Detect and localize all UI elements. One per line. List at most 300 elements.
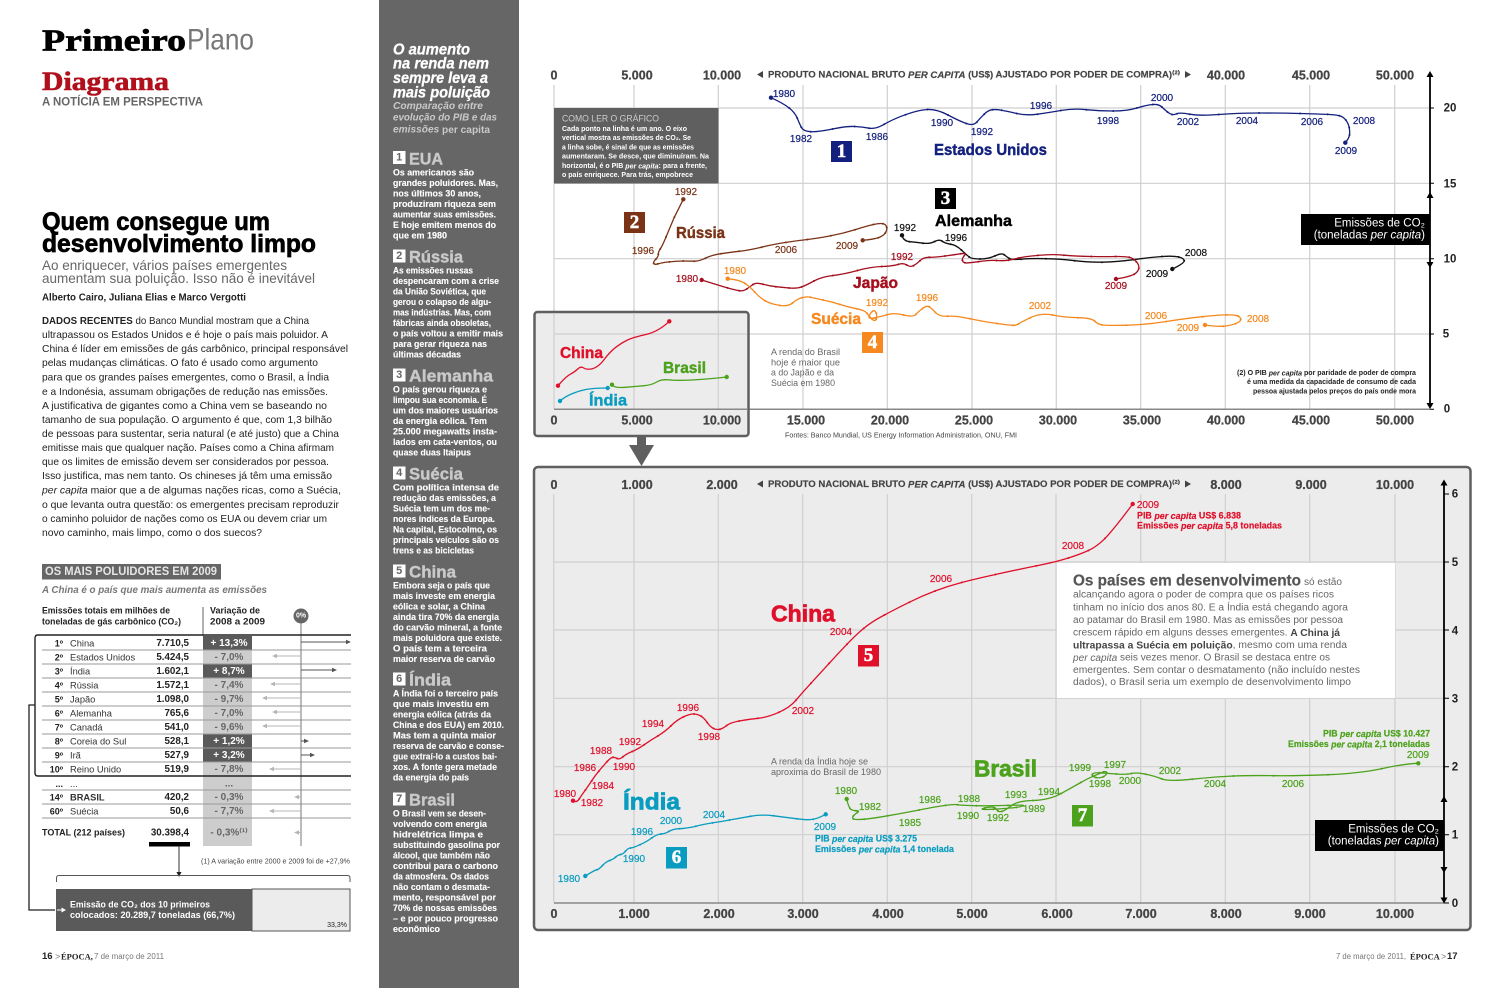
section masthead xyxy=(42,22,254,108)
detail series: Índia xyxy=(558,788,955,885)
rows: 50,6 xyxy=(170,806,190,817)
detail series: China: 2008 xyxy=(1062,541,1085,552)
bottom x axis labels: 45.000 xyxy=(1292,414,1330,428)
sidebar: Índia: 6 xyxy=(396,673,402,685)
rows: 60º xyxy=(50,806,64,816)
zero line: 0% xyxy=(296,612,307,620)
sidebar heading: O aumento xyxy=(393,42,470,58)
sidebar: Índia: xos. A fonte gera metade xyxy=(393,762,497,772)
sidebar: China: 5 xyxy=(396,565,402,577)
detail x axis title: PRODUTO NACIONAL BRUTO PER CAPITA (US$) AJUSTADO POR PODER DE COMPRA)⁽²⁾ xyxy=(768,479,1181,490)
series: Rússia xyxy=(624,187,887,264)
detail series: Índia: Emissões per capita 1,4 tonelada xyxy=(815,844,955,855)
sidebar: Brasil xyxy=(393,790,500,934)
detail y axis: 5 xyxy=(1452,557,1459,569)
x axis title: PRODUTO NACIONAL BRUTO PER CAPITA (US$) AJUSTADO POR PODER DE COMPRA)⁽²⁾ xyxy=(768,70,1181,80)
detail series: Brasil: 1994 xyxy=(1038,787,1061,798)
right page footer: 7 de março de 2011, xyxy=(1336,952,1406,961)
sidebar: Índia: que mais investiu em xyxy=(393,699,489,709)
sidebar: China xyxy=(393,562,502,664)
rows: ... xyxy=(55,779,63,789)
detail top x labels: 2.000 xyxy=(706,478,738,492)
series: Japão: 2009 xyxy=(1105,281,1128,292)
series: Japão xyxy=(676,252,1139,292)
series: Rússia: 1992 xyxy=(675,187,698,198)
detail top x labels: 0 xyxy=(551,478,558,492)
inset series: China: China xyxy=(560,345,603,362)
series: Japão: 1992 xyxy=(891,252,914,263)
callout: developing countries: só estão xyxy=(1304,577,1343,588)
detail series: Brasil: 1997 xyxy=(1104,760,1127,771)
rows: 7.710,5 xyxy=(156,638,190,649)
rows: Coreia do Sul xyxy=(70,736,126,746)
callout: developing countries: tinham no início dos anos 80. E a Índia está chegando agora xyxy=(1073,602,1349,614)
detail y axis xyxy=(1440,480,1459,910)
callout: developing countries: emergentes. Sem contar o desmatamento (não incluído nestes xyxy=(1073,665,1360,676)
detail y axis: 2 xyxy=(1452,762,1458,774)
sidebar: Alemanha: lados em cata-ventos, ou xyxy=(393,437,497,447)
section masthead: A NOTÍCIA EM PERSPECTIVA xyxy=(42,96,203,108)
bottom x axis labels: 30.000 xyxy=(1039,414,1077,428)
rows: 519,9 xyxy=(164,764,190,775)
series: Alemanha: 1996 xyxy=(945,233,968,244)
column headers xyxy=(42,606,265,636)
series: Suécia: 1980 xyxy=(724,266,747,277)
note: Brazil income: hoje é maior que xyxy=(771,358,840,368)
detail series: Brasil: 2000 xyxy=(1119,776,1142,787)
detail series: China: 1980 xyxy=(554,789,577,800)
callout: developing countries: alcançando agora o poder de compra que os países ricos xyxy=(1073,590,1334,600)
y axis label xyxy=(1301,214,1430,245)
footnote 2: (2) O PIB per capita por paridade de poder de compra xyxy=(1237,368,1417,377)
rows: + 3,2% xyxy=(213,750,245,761)
rows: Estados Unidos xyxy=(70,652,135,662)
title: desenvolvimento limpo xyxy=(42,230,316,258)
subtitle xyxy=(42,257,315,286)
detail series: Brasil: 1980 xyxy=(835,786,858,797)
inset series: China xyxy=(556,319,672,388)
detail y axis: 0 xyxy=(1452,898,1458,910)
sidebar: Brasil: álcool, que também não xyxy=(393,850,490,860)
sidebar heading: mais poluição xyxy=(393,84,490,102)
detail series: Brasil: 1982 xyxy=(859,802,882,813)
sidebar: Brasil: não contam o desmata- xyxy=(393,882,490,892)
rows: Rússia xyxy=(70,680,99,690)
note: India income: aproxima do Brasil de 1980 xyxy=(771,767,881,777)
bottom x axis labels: 50.000 xyxy=(1376,414,1414,428)
bottom x axis labels xyxy=(787,414,1414,428)
share bar: Emissão de CO₂ dos 10 primeiros xyxy=(70,900,210,910)
sidebar: China: China xyxy=(409,562,457,582)
detail series: China: 1998 xyxy=(698,732,721,743)
x axis baseline xyxy=(554,408,1430,410)
rows: 528,1 xyxy=(164,736,190,747)
sidebar: Índia xyxy=(393,670,504,782)
article text xyxy=(41,315,348,539)
note: Brazil income: A renda do Brasil xyxy=(771,347,840,357)
sidebar: Suécia: trens e as bicicletas xyxy=(393,546,474,556)
sidebar: Rússia: 2 xyxy=(396,250,402,262)
note: Brazil income xyxy=(771,347,840,388)
series: Rússia: 2006 xyxy=(775,245,798,256)
sidebar: Índia: A Índia foi o terceiro país xyxy=(393,688,498,698)
sidebar: EUA xyxy=(393,150,498,240)
detail bottom x labels: 6.000 xyxy=(1041,907,1073,921)
sidebar heading: na renda nem xyxy=(393,56,489,73)
how to read box xyxy=(554,108,718,184)
how to read box: Cada ponto na linha é um ano. O eixo xyxy=(562,124,687,133)
series: Estados Unidos: 2000 xyxy=(1151,93,1174,104)
series: Estados Unidos: 1986 xyxy=(866,132,889,143)
sidebar: Alemanha: Alemanha xyxy=(409,366,494,386)
article text: China é líder em emissões de gás carbônico, principal responsável xyxy=(42,343,348,355)
title xyxy=(42,208,316,258)
detail series: China xyxy=(554,500,1282,809)
rows: 14º xyxy=(50,792,64,802)
sidebar heading xyxy=(393,42,497,136)
note: India income xyxy=(771,756,881,777)
sidebar: Brasil: O Brasil vem se desen- xyxy=(393,808,486,818)
sidebar: Alemanha: um dos maiores usuários xyxy=(393,406,498,416)
row rules xyxy=(42,650,351,818)
sidebar: Rússia: fábricas ainda obsoletas, xyxy=(393,318,491,328)
sidebar: EUA: Os americanos são xyxy=(393,168,474,178)
sidebar: Rússia xyxy=(393,248,503,360)
inset series: Índia xyxy=(558,386,627,410)
rows: 1º xyxy=(55,638,64,648)
sidebar: EUA: aumentar suas emissões. xyxy=(393,210,496,220)
detail series: Brasil: 2009 xyxy=(1407,750,1430,761)
sidebar: EUA: EUA xyxy=(409,150,443,168)
top ten frame xyxy=(35,635,351,776)
series: Estados Unidos: 1996 xyxy=(1030,101,1053,112)
rows: - 0,3% xyxy=(215,792,244,803)
series: Rússia: 1996 xyxy=(632,246,655,257)
sidebar: Índia: reserva de carvão e conse- xyxy=(393,741,504,751)
rows: 4º xyxy=(55,680,64,690)
sidebar: EUA: produziram riqueza sem xyxy=(393,199,496,209)
rows: China xyxy=(70,638,95,648)
series: Alemanha: 2008 xyxy=(1185,248,1208,259)
detail series: China: 1982 xyxy=(581,798,604,809)
sidebar: Brasil: substituindo gasolina por xyxy=(393,840,500,850)
left page footer: ÉPOCA, xyxy=(61,952,93,962)
detail bottom x labels: 1.000 xyxy=(618,907,650,921)
detail series: Brasil: 2004 xyxy=(1204,779,1227,790)
detail series: Índia: 1996 xyxy=(631,827,654,838)
detail series: Índia: PIB per capita US$ 3.275 xyxy=(815,834,918,844)
connector arrow xyxy=(29,705,66,912)
top x axis labels: 5.000 xyxy=(621,69,653,83)
series: Alemanha xyxy=(894,188,1208,280)
series: Estados Unidos: 2002 xyxy=(1177,117,1200,128)
sidebar: Alemanha xyxy=(393,366,498,458)
detail top x labels: 1.000 xyxy=(621,478,653,492)
detail series: Brasil: 1993 xyxy=(1005,790,1028,801)
detail top x labels: 10.000 xyxy=(1376,478,1414,492)
sidebar: Suécia: principais veículos são os xyxy=(393,535,499,545)
article text: DADOS RECENTES do Banco Mundial mostram que a China xyxy=(42,315,309,327)
detail series: Índia: 2004 xyxy=(703,810,726,821)
sidebar: China: mais investe em energia xyxy=(393,591,496,601)
inset: emerging countries preview: 0 xyxy=(551,414,558,428)
detail series: Brasil: 1998 xyxy=(1089,779,1112,790)
callout: developing countries xyxy=(1057,563,1395,698)
inset series: Brasil: Brasil xyxy=(663,360,706,377)
detail y axis: 3 xyxy=(1452,694,1458,706)
how to read box: horizontal, é o PIB per capita: para a frente, xyxy=(562,161,707,170)
detail series: Brasil: Brasil xyxy=(974,756,1037,782)
detail series: China: Emissões per capita 5,8 toneladas xyxy=(1137,520,1282,532)
callout: developing countries: ultrapassa a Suécia em poluição , mesmo com uma renda xyxy=(1073,640,1348,651)
series: Estados Unidos: 1998 xyxy=(1097,116,1120,127)
detail y axis label: Emissões de CO₂ xyxy=(1348,824,1439,836)
detail series: Índia: Índia xyxy=(623,788,680,815)
rows: 9º xyxy=(55,750,64,760)
section masthead: Plano xyxy=(187,24,254,56)
article text: Isso justifica, mas nem tanto. Os chineses já têm uma emissão xyxy=(42,470,332,482)
sidebar: Brasil: volvendo com energia xyxy=(393,819,488,829)
bottom x axis labels: 20.000 xyxy=(871,414,909,428)
how to read box: vertical mostra as emissões de CO₂. Se xyxy=(562,133,691,142)
how to read box: o país enriquece. Para trás, empobrece xyxy=(562,170,693,179)
rows: 765,6 xyxy=(164,708,190,719)
detail series: China: 1990 xyxy=(613,762,636,773)
sidebar: China: Embora seja o país que xyxy=(393,580,490,590)
detail series: Brasil: 1985 xyxy=(899,818,922,829)
sidebar: Índia: Mas tem a quinta maior xyxy=(393,730,497,740)
series: Suécia: 2009 xyxy=(1177,323,1200,334)
sidebar: China: O país tem a terceira xyxy=(393,644,488,654)
detail series: Brasil: 1992 xyxy=(987,813,1010,824)
column headers: 2008 a 2009 xyxy=(210,616,265,626)
sidebar: Rússia: mas indústrias. Mas, com xyxy=(393,308,491,318)
left page footer: 7 de março de 2011 xyxy=(94,952,165,961)
series: Estados Unidos: 2006 xyxy=(1301,117,1324,128)
detail y axis: 6 xyxy=(1452,489,1458,501)
panel: gray sidebar xyxy=(379,0,519,988)
article text: o que levanta outra questão: os emergentes precisam reproduzir xyxy=(42,499,339,511)
detail x axis baseline xyxy=(554,902,1444,904)
share bar xyxy=(56,889,350,931)
rows: 5º xyxy=(55,694,64,704)
left page footer: > xyxy=(55,952,60,962)
detail series: Brasil: 7 xyxy=(1078,805,1088,826)
column headers: toneladas de gás carbônico (CO₂) xyxy=(42,616,181,626)
detail bottom x labels: 0 xyxy=(551,907,558,921)
series: Suécia: 4 xyxy=(868,332,878,353)
rows xyxy=(42,638,248,838)
detail bottom x labels: 4.000 xyxy=(872,907,904,921)
article text: per capita maior que a de algumas nações ricas, como a Suécia, xyxy=(41,484,341,496)
series: Alemanha: 2009 xyxy=(1146,269,1169,280)
detail series: Índia: 2009 xyxy=(814,822,837,833)
top x axis labels: 40.000 xyxy=(1207,69,1245,83)
inset: emerging countries preview: 5.000 xyxy=(621,414,653,428)
article text: emitisse mais que qualquer nação. Países como a China afirmam xyxy=(42,442,334,454)
rows: 10º xyxy=(50,764,64,774)
rows: Alemanha xyxy=(70,708,113,718)
subtitle: aumentam sua poluição. Isso não é inevitável xyxy=(42,270,315,286)
rows: Canadá xyxy=(70,722,103,732)
sidebar: Alemanha: 3 xyxy=(396,369,402,381)
detail series: China: 2009 xyxy=(1137,500,1160,511)
sidebar: Alemanha: O país gerou riqueza e xyxy=(393,384,487,394)
series: Alemanha: 3 xyxy=(941,188,950,209)
detail bottom x labels: 7.000 xyxy=(1125,907,1157,921)
sidebar heading: Comparação entre xyxy=(393,101,483,112)
sidebar: Alemanha: 25.000 megawatts insta- xyxy=(393,426,497,436)
right page footer xyxy=(1336,951,1458,962)
rows: - 7,7% xyxy=(215,806,244,817)
detail series: Brasil: 1988 xyxy=(958,794,981,805)
rows: - 7,4% xyxy=(215,680,244,691)
sidebar: Brasil: 7 xyxy=(396,793,402,805)
rows: ... xyxy=(70,779,78,789)
detail bottom x labels: 2.000 xyxy=(703,907,735,921)
rows: 8º xyxy=(55,736,64,746)
detail top x labels: 9.000 xyxy=(1295,478,1327,492)
chart: rich countries xyxy=(551,69,1457,439)
rows: 1.098,0 xyxy=(156,694,190,705)
sidebar heading: evolução do PIB e das xyxy=(393,112,497,124)
detail bottom x labels: 9.000 xyxy=(1294,907,1326,921)
variation arrows xyxy=(262,640,351,835)
sidebar: China: ainda tira 70% da energia xyxy=(393,612,500,622)
detail grid xyxy=(554,494,1444,903)
sidebar: Suécia: Suécia xyxy=(409,464,464,484)
detail series: Índia: 1990 xyxy=(623,854,646,865)
series: Estados Unidos: 1980 xyxy=(773,89,796,100)
panel: polluters table xyxy=(29,564,351,931)
sidebar: Índia: Índia xyxy=(409,670,452,690)
series: Suécia: 1992 xyxy=(866,298,889,309)
rows: - 0,3%⁽¹⁾ xyxy=(210,828,248,838)
sidebar: China: eólica e solar, a China xyxy=(393,602,486,612)
series: Estados Unidos: 1990 xyxy=(931,118,954,129)
article text: tamanho de sua população. O argumento é que, com 1,3 bilhão xyxy=(42,414,332,426)
series: Estados Unidos: 2008 xyxy=(1353,116,1376,127)
sidebar: Índia: China e dos EUA) em 2010. xyxy=(393,720,504,730)
detail series: Brasil: 1986 xyxy=(919,795,942,806)
rows: 30.398,4 xyxy=(151,828,190,838)
sidebar: China: mais poluidora que existe. xyxy=(393,633,502,643)
rows: 7º xyxy=(55,722,64,732)
rows: + 8,7% xyxy=(213,666,245,677)
detail series: China: 1996 xyxy=(677,703,700,714)
article text: pelas mudanças climáticas. O fato é usado como argumento xyxy=(42,357,318,369)
rows: 5.424,5 xyxy=(156,652,190,663)
panel: detail chart of emerging countries xyxy=(534,467,1470,930)
grid xyxy=(554,85,1430,409)
sidebar heading: emissões per capita xyxy=(393,124,490,136)
sidebar: Brasil: Brasil xyxy=(409,790,455,810)
detail series: Brasil: 2002 xyxy=(1159,766,1182,777)
series: Estados Unidos: 2009 xyxy=(1335,146,1358,157)
y axis: 5 xyxy=(1443,329,1450,341)
y axis: 20 xyxy=(1444,103,1456,115)
detail series: China: 1986 xyxy=(574,763,597,774)
variation column shading xyxy=(203,636,252,846)
detail bottom x labels: 3.000 xyxy=(787,907,819,921)
rows: 541,0 xyxy=(164,722,190,733)
series: Suécia: Suécia xyxy=(811,311,861,328)
rows: Suécia xyxy=(70,806,99,816)
article text: novo caminho, mais limpo, como o dos suecos? xyxy=(42,527,262,539)
sidebar: EUA: E hoje emitem menos do xyxy=(393,220,496,230)
article text: A justificativa de gigantes como a China vem se baseando no xyxy=(42,400,327,412)
series: Rússia: 2 xyxy=(630,212,639,233)
detail series: Brasil xyxy=(835,728,1430,829)
sidebar: EUA: nos últimos 30 anos, xyxy=(393,188,481,198)
sidebar: Brasil: hidrelétrica limpa e xyxy=(393,830,483,840)
sidebar: Índia: da energia do país xyxy=(393,772,469,782)
article text: para que os grandes países emergentes, como o Brasil, a Índia xyxy=(42,370,329,384)
left page footer xyxy=(42,951,165,962)
note: India income: A renda da Índia hoje se xyxy=(771,756,868,766)
y axis: 0 xyxy=(1444,404,1450,416)
series: Estados Unidos: 1 xyxy=(837,141,846,162)
callout: developing countries: crescem rápido em alguns desses emergentes. A China já xyxy=(1073,628,1341,638)
detail series: China: 2006 xyxy=(930,574,953,585)
footnote 2: é uma medida da capacidade de consumo de cada xyxy=(1247,377,1417,386)
series: Japão: Japão xyxy=(853,275,898,292)
column headers: Emissões totais em milhões de xyxy=(42,606,170,616)
sidebar: Brasil: mento, responsável por xyxy=(393,892,497,902)
series: Suécia: 2008 xyxy=(1247,314,1270,325)
callout: developing countries: per capita seis vezes menor. O Brasil se destaca entre os xyxy=(1072,652,1330,664)
rows: - 7,8% xyxy=(215,764,244,775)
bottom x axis labels: 25.000 xyxy=(955,414,993,428)
sources: Fontes: Banco Mundial, US Energy Information Administration, ONU, FMI xyxy=(785,430,1017,440)
footnote 2 xyxy=(1237,368,1417,396)
series: Suécia: 1996 xyxy=(916,293,939,304)
right page footer: 17 xyxy=(1447,951,1458,962)
series: Estados Unidos: 1992 xyxy=(971,127,994,138)
how to read box: COMO LER O GRÁFICO xyxy=(562,114,659,124)
sidebar: Suécia: 4 xyxy=(396,467,403,479)
sidebar: Suécia: Na capital, Estocolmo, os xyxy=(393,524,497,534)
detail series: Brasil: 1999 xyxy=(1069,763,1092,774)
detail series: China: 2004 xyxy=(830,627,853,638)
detail y axis: 4 xyxy=(1452,626,1459,638)
sidebar: Suécia: Suécia tem um dos me- xyxy=(393,504,490,514)
inset: emerging countries preview: 10.000 xyxy=(703,414,741,428)
how to read box: aumentaram. Se desce, que diminuíram. Na xyxy=(562,152,710,160)
detail series: Índia: 1980 xyxy=(558,874,581,885)
sidebar: Rússia: despencaram com a crise xyxy=(393,276,499,286)
series: Suécia xyxy=(724,266,1270,353)
inset series: Índia: Índia xyxy=(589,393,627,410)
rows: 1.602,1 xyxy=(156,666,190,677)
detail series: China: PIB per capita US$ 6.838 xyxy=(1137,510,1241,522)
sidebar: Rússia: gerou o colapso de algu- xyxy=(393,297,491,307)
detail bottom x labels: 8.000 xyxy=(1210,907,1242,921)
bottom x axis labels: 15.000 xyxy=(787,414,825,428)
note: Brazil income: Suécia em 1980 xyxy=(771,378,835,388)
sidebar heading: sempre leva a xyxy=(393,70,488,87)
sidebar: EUA: que em 1980 xyxy=(393,230,447,240)
article text: o caminho poluidor de nações como os EUA ou devem criar um xyxy=(42,513,327,525)
rows: 3º xyxy=(55,666,64,676)
series: Estados Unidos xyxy=(769,89,1376,162)
footnote 2: pessoa ajustada pelos preços do país onde mora xyxy=(1253,386,1417,396)
rows: - 7,0% xyxy=(215,708,244,719)
rows: - 9,6% xyxy=(215,722,244,733)
series: Rússia: Rússia xyxy=(676,225,725,242)
detail series: China: 1984 xyxy=(592,781,615,792)
rows: Índia xyxy=(70,666,91,676)
